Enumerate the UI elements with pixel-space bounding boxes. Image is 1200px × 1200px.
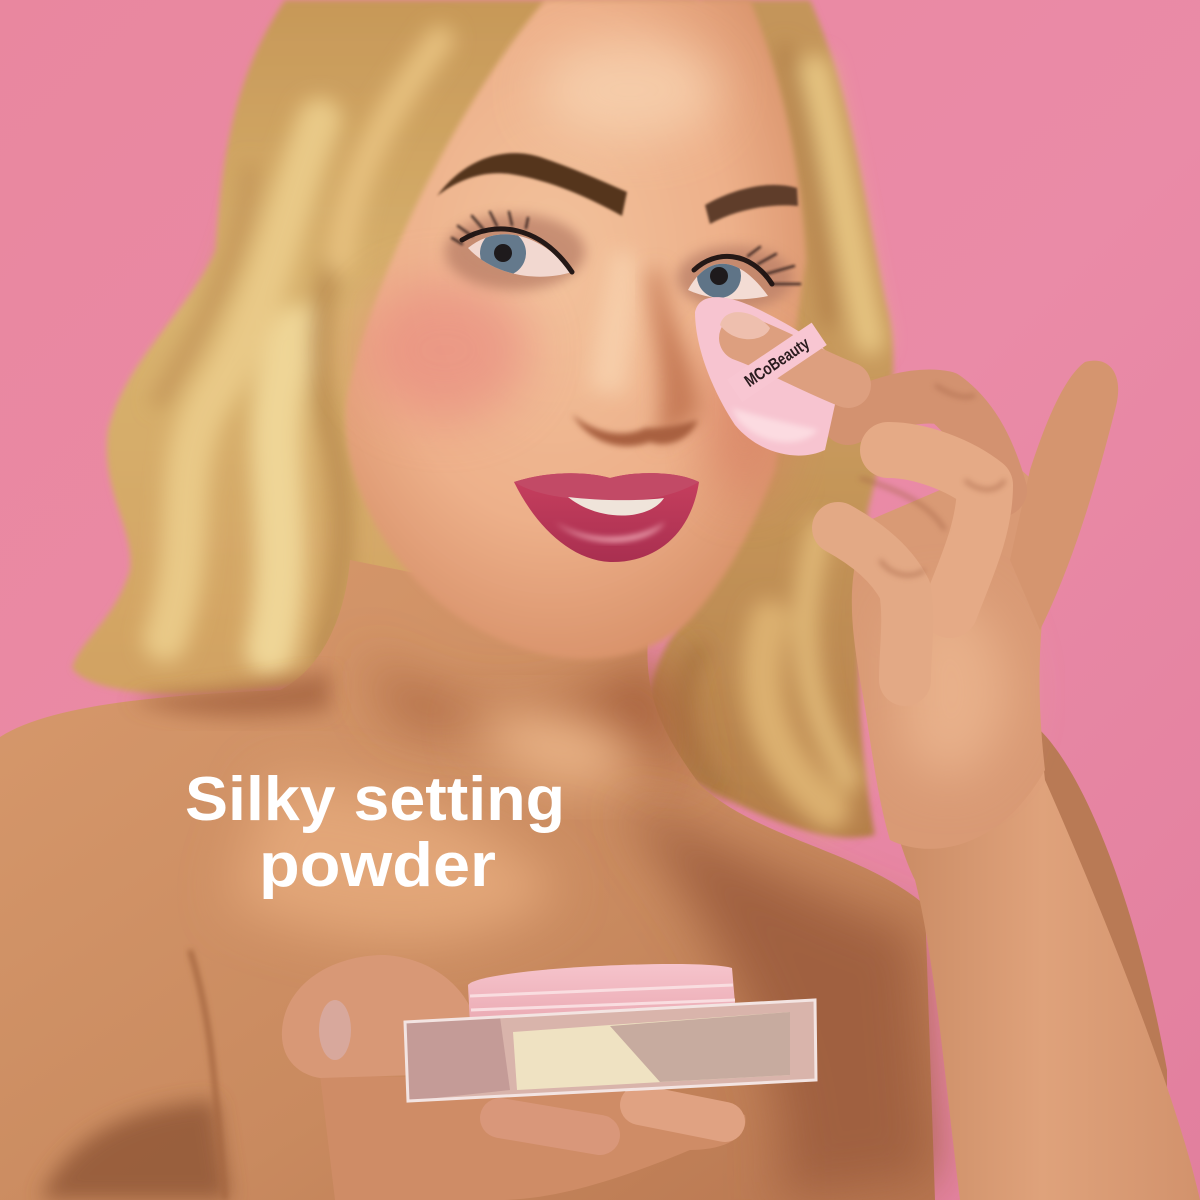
thumb nail bbox=[319, 1000, 351, 1060]
pink jar bbox=[468, 964, 736, 1025]
middle finger bbox=[888, 450, 985, 610]
left eye bbox=[445, 212, 585, 290]
right eyebrow bbox=[705, 185, 798, 224]
cheek blush bbox=[360, 280, 530, 420]
second finger bbox=[500, 1118, 600, 1135]
caption bbox=[185, 765, 565, 900]
fingernail bbox=[720, 312, 770, 339]
thumb bbox=[282, 955, 475, 1078]
ribbon label: MCoBeauty bbox=[741, 333, 813, 391]
caption line 2: powder bbox=[259, 831, 496, 900]
nose bbox=[572, 250, 700, 446]
powder window bbox=[513, 1012, 790, 1090]
ring finger bbox=[838, 528, 907, 680]
lips bbox=[514, 473, 699, 562]
index finger knuckles bbox=[848, 396, 1000, 490]
face bbox=[345, 0, 806, 659]
jaw shading bbox=[705, 340, 785, 500]
far shoulder bbox=[1000, 730, 1167, 1200]
setting powder compact bbox=[405, 964, 816, 1101]
front finger bbox=[640, 1105, 725, 1122]
thumb bbox=[1010, 361, 1118, 630]
torso and neck bbox=[0, 560, 935, 1200]
powder puff with branded ribbon bbox=[695, 297, 848, 456]
right eye bbox=[677, 246, 800, 310]
left eyebrow bbox=[437, 153, 627, 216]
lower hand holding compact bbox=[282, 955, 746, 1200]
index finger bbox=[742, 338, 848, 385]
hair bbox=[72, 0, 893, 838]
clear case bbox=[405, 1000, 816, 1101]
raised arm and hand bbox=[838, 361, 1200, 1200]
caption line 1: Silky setting bbox=[185, 765, 565, 834]
forehead highlight bbox=[540, 40, 720, 140]
